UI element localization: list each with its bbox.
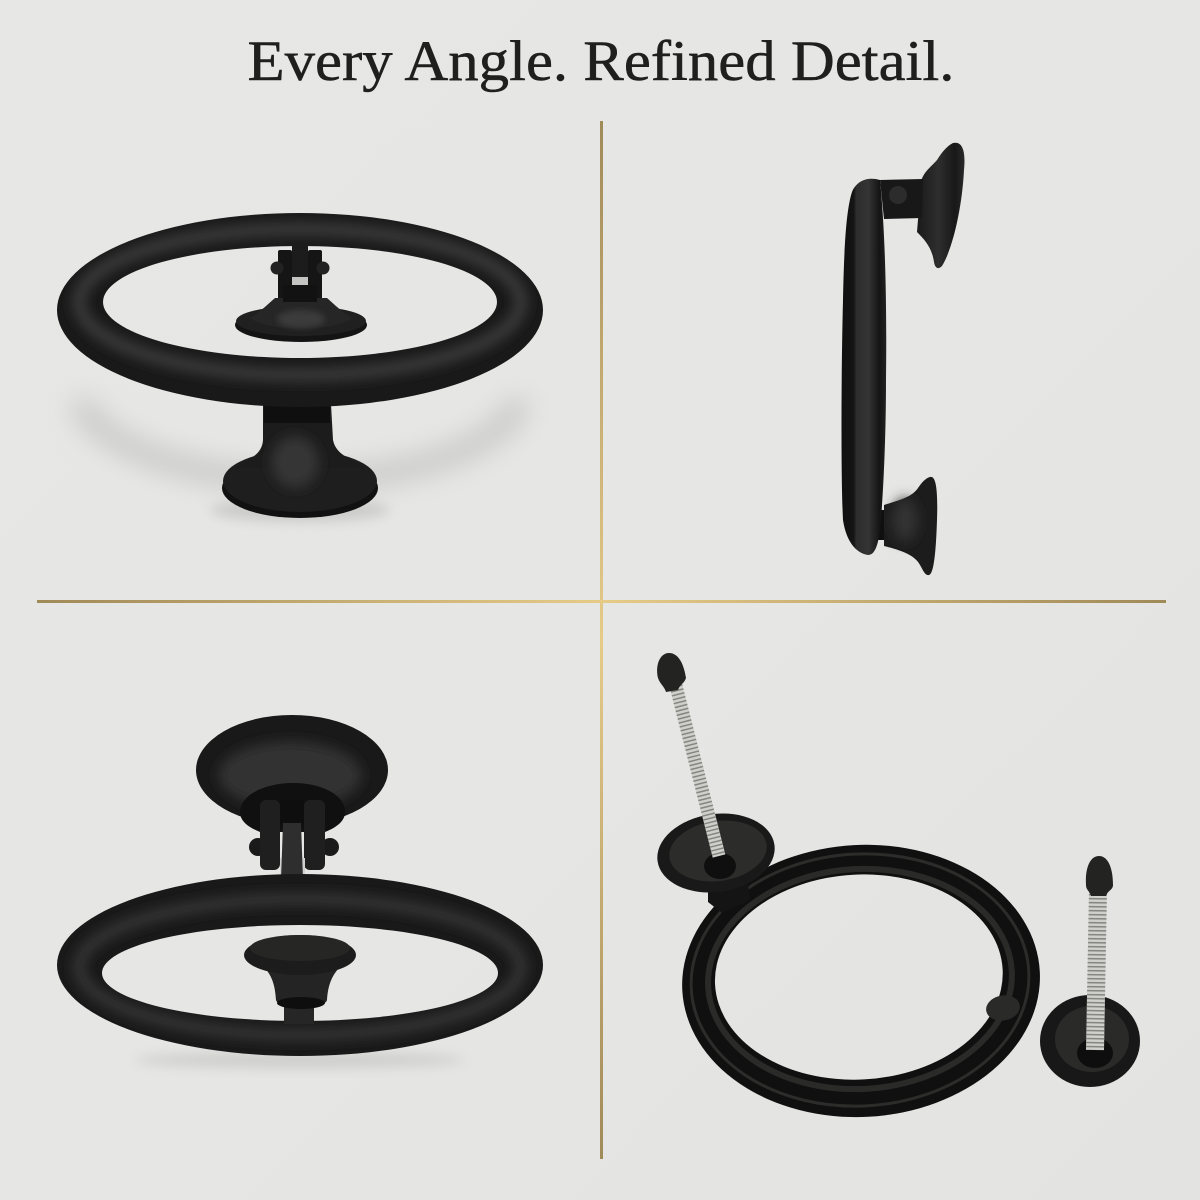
hinge xyxy=(249,800,339,880)
top backplate xyxy=(917,143,965,268)
hinge xyxy=(270,244,330,302)
panel: front perspective view xyxy=(57,213,543,522)
ring shadow xyxy=(80,400,520,480)
panel: side profile view xyxy=(842,143,965,575)
base knob below ring xyxy=(222,404,378,518)
tall screw xyxy=(657,653,719,856)
ring bracket xyxy=(708,884,750,913)
title: Every Angle. Refined Detail. xyxy=(248,30,955,93)
short screw plate xyxy=(1040,995,1140,1087)
top hinge xyxy=(880,179,923,219)
short screw xyxy=(1086,856,1113,1050)
panel: underside perspective view xyxy=(57,715,543,1068)
tall screw plate xyxy=(652,806,780,900)
knob shadow xyxy=(210,498,390,522)
ring xyxy=(57,874,543,1056)
ring xyxy=(57,213,543,407)
backplate xyxy=(196,715,388,832)
ring shadow xyxy=(135,1052,465,1068)
gold divider: horizontal xyxy=(37,600,1166,603)
hinge bolt xyxy=(889,186,907,204)
lower post and backplate xyxy=(877,477,937,575)
ring stop disc xyxy=(984,993,1022,1023)
gold divider: vertical xyxy=(600,121,603,1159)
inner knob xyxy=(235,285,367,342)
panel: hardware components view xyxy=(652,653,1140,1126)
large flat ring xyxy=(675,836,1047,1126)
ring edge xyxy=(842,179,886,555)
inner knob xyxy=(244,935,356,1024)
